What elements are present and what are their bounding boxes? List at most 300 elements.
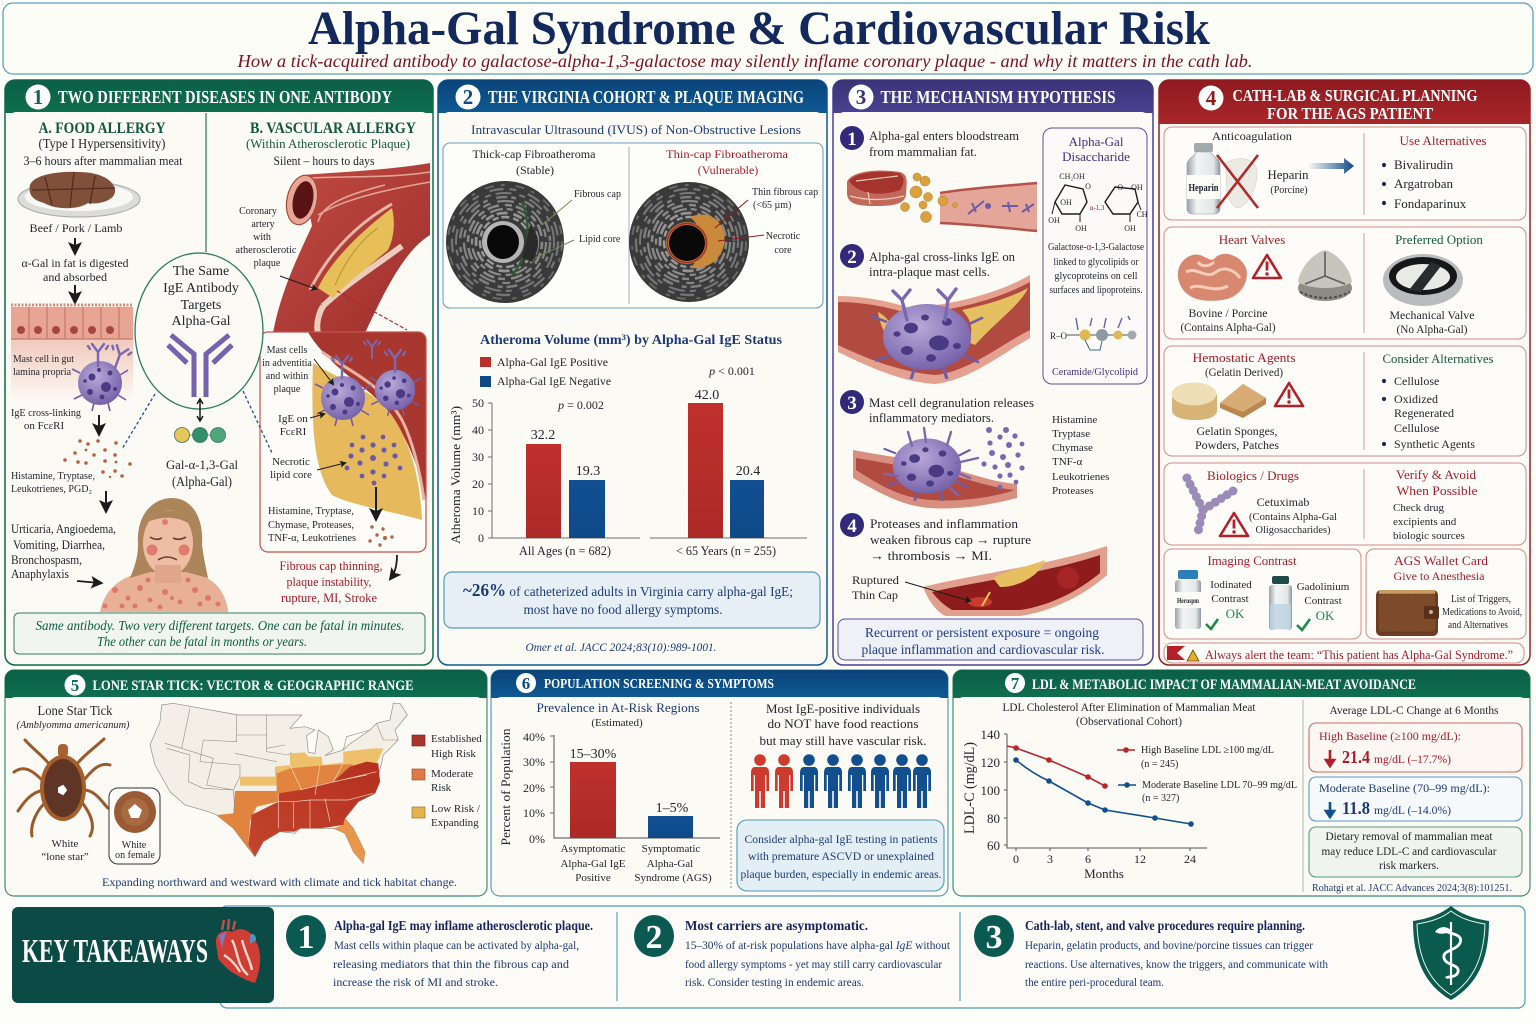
chart heading bbox=[1002, 700, 1256, 728]
panel 7 number bbox=[1005, 673, 1025, 693]
takeaway 2 bbox=[634, 915, 951, 989]
inset: female tick bbox=[109, 788, 160, 864]
arrow bbox=[98, 415, 100, 433]
label artery: with bbox=[253, 232, 271, 243]
check bbox=[1206, 619, 1218, 629]
double arrow bbox=[197, 399, 203, 421]
statement bbox=[760, 701, 926, 748]
bar chart: prevalence: 30% bbox=[523, 755, 545, 769]
central circle: same IgE bbox=[135, 253, 263, 409]
takeaway 2: risk. Consider testing in endemic areas. bbox=[685, 975, 864, 989]
bar chart: atheroma volume: 19.3 bbox=[576, 464, 600, 479]
step 3: inflammatory mediators. bbox=[869, 410, 994, 425]
label mast cell gut: Mast cell in gut bbox=[13, 353, 74, 365]
consider alternatives: Cellulose bbox=[1394, 421, 1439, 435]
bar chart: prevalence: Alpha-Gal bbox=[647, 858, 693, 870]
mediator list: Tryptase bbox=[1052, 428, 1090, 440]
label molecule: (Alpha-Gal) bbox=[172, 475, 232, 490]
chart legend: High Baseline LDL ≥100 mg/dL bbox=[1141, 745, 1274, 756]
IVUS image stable bbox=[446, 181, 564, 303]
card: hemostatic agents: Hemostatic Agents bbox=[1192, 350, 1296, 365]
labels plaque: FcεRI bbox=[280, 426, 307, 438]
iodinated label: Contrast bbox=[1211, 593, 1249, 605]
central circle: same IgE: Targets bbox=[181, 298, 221, 313]
takeaway 1: increase the risk of MI and stroke. bbox=[333, 975, 498, 989]
panel 3 number bbox=[848, 84, 874, 110]
alternatives: Bivalirudin bbox=[1394, 157, 1454, 172]
arrow bbox=[74, 238, 76, 252]
bar chart: prevalence: Alpha-Gal IgE bbox=[560, 858, 626, 870]
statement: do NOT have food reactions bbox=[768, 716, 918, 731]
statement: Most IgE-positive individuals bbox=[766, 701, 920, 716]
mediator list: TNF-α bbox=[1052, 456, 1082, 468]
panel 5 number: 5 bbox=[71, 676, 79, 695]
vascular allergy heading bbox=[246, 120, 416, 168]
map legend: High Risk bbox=[431, 748, 476, 760]
mediators bbox=[368, 525, 394, 547]
verify: Verify & Avoid bbox=[1396, 467, 1476, 482]
line chart: LDL: 12 bbox=[1134, 852, 1146, 866]
food allergy heading: A. FOOD ALLERGY bbox=[38, 120, 166, 137]
valve labels bbox=[1180, 306, 1474, 336]
alternatives: Use Alternatives bbox=[1400, 133, 1486, 148]
verify: excipients and bbox=[1393, 516, 1457, 528]
food allergy heading bbox=[24, 120, 183, 168]
structure: sugar rings: OH bbox=[1048, 216, 1060, 225]
stat: moderate baseline: mg/dL (–14.0%) bbox=[1374, 803, 1451, 817]
label artery: Coronary bbox=[239, 206, 277, 217]
granules bbox=[63, 439, 132, 478]
consider alternatives: Regenerated bbox=[1394, 406, 1454, 420]
card: anticoagulation bbox=[1164, 127, 1526, 220]
panel 4 number bbox=[1198, 86, 1224, 110]
thin-cap heading: Thin-cap Fibroatheroma bbox=[666, 147, 789, 161]
step 1 bbox=[840, 126, 1019, 159]
bar chart: atheroma volume: All Ages (n = 682) bbox=[519, 543, 611, 558]
step 2: 2 bbox=[847, 247, 857, 268]
card: imaging contrast: Imaging Contrast bbox=[1208, 553, 1297, 568]
label cross-linking: on FcεRI bbox=[24, 420, 65, 432]
cetuximab labels bbox=[1249, 495, 1337, 536]
cetuximab labels: (Contains Alpha-Gal bbox=[1249, 511, 1337, 523]
thin cap labels bbox=[715, 187, 818, 256]
takeaway 1: releasing mediators that thin the fibrous cap and bbox=[333, 957, 569, 971]
panel 7: LDL impact bbox=[953, 670, 1530, 896]
step 2 bbox=[840, 244, 1015, 279]
line chart: LDL bbox=[962, 727, 1207, 881]
vascular allergy heading: (Within Atherosclerotic Plaque) bbox=[246, 136, 410, 151]
labels plaque: in adventitia bbox=[262, 358, 312, 369]
label ruptured cap: Ruptured bbox=[852, 573, 899, 587]
iodinated label: Iodinated bbox=[1210, 579, 1252, 591]
map legend: Established bbox=[431, 733, 482, 745]
card: wallet: AGS Wallet Card bbox=[1394, 553, 1489, 568]
stat: high baseline: 21.4 bbox=[1342, 747, 1370, 767]
step 1: from mammalian fat. bbox=[869, 144, 977, 159]
labels plaque: Chymase, Proteases, bbox=[268, 519, 354, 531]
step 3: Mast cell degranulation releases bbox=[869, 395, 1034, 410]
structure: sugar rings: α-1,3 bbox=[1090, 204, 1105, 212]
bar chart: prevalence: Syndrome (AGS) bbox=[634, 872, 712, 884]
consider alternatives: Synthetic Agents bbox=[1394, 437, 1475, 451]
bar chart: atheroma volume: 32.2 bbox=[531, 428, 555, 443]
alternatives: Fondaparinux bbox=[1394, 196, 1467, 211]
illustration: degranulation bbox=[853, 427, 1025, 508]
panel 4 heading: FOR THE AGS PATIENT bbox=[1267, 104, 1434, 123]
description: Galactose-α-1,3-Galactose bbox=[1048, 242, 1144, 253]
step 4: weaken fibrous cap → rupture bbox=[870, 532, 1031, 547]
thick-cap heading bbox=[472, 147, 596, 177]
step 3: 3 bbox=[847, 393, 857, 414]
label molecule: Gal-α-1,3-Gal bbox=[166, 457, 238, 472]
bar chart: atheroma volume: 0 bbox=[478, 531, 484, 545]
central circle: same IgE: Alpha-Gal bbox=[171, 314, 231, 329]
bar chart: prevalence: 10% bbox=[523, 806, 545, 820]
box: disaccharide: Alpha-Gal bbox=[1069, 134, 1124, 149]
line chart: LDL: 80 bbox=[987, 811, 1000, 826]
callout: testing bbox=[737, 820, 944, 891]
structure: sugar rings: CH bbox=[1136, 210, 1148, 219]
callout: 26 percent bbox=[444, 572, 820, 628]
card: hemostatic agents: (Gelatin Derived) bbox=[1205, 365, 1283, 379]
callout: testing: Consider alpha-gal IgE testing in patients bbox=[744, 832, 938, 846]
chart legend bbox=[1117, 745, 1297, 804]
labels plaque: Mast cells bbox=[267, 345, 308, 356]
description: surfaces and lipoproteins. bbox=[1050, 285, 1142, 296]
iodinated label bbox=[1210, 579, 1252, 621]
label cross-linking bbox=[11, 407, 81, 432]
tick caption: “lone star” bbox=[41, 851, 89, 863]
icon: cetuximab antibody bbox=[1187, 478, 1233, 536]
icon: heparin vial bbox=[1187, 143, 1258, 214]
bar chart: atheroma volume: 50 bbox=[472, 396, 484, 410]
stat: moderate baseline bbox=[1309, 777, 1522, 821]
card: heart valves bbox=[1164, 227, 1526, 339]
consider alternatives: Consider Alternatives bbox=[1382, 351, 1494, 366]
arrow bbox=[105, 491, 107, 510]
IVUS box bbox=[443, 143, 823, 308]
legend bbox=[480, 355, 611, 388]
icon: steak on plate bbox=[18, 172, 140, 217]
icon: tick bbox=[14, 739, 110, 836]
map legend: Expanding bbox=[431, 817, 479, 829]
verify: biologic sources bbox=[1393, 530, 1465, 542]
line chart: LDL: 60 bbox=[987, 838, 1000, 853]
tick caption: White bbox=[52, 838, 79, 850]
bar chart: prevalence: 0% bbox=[529, 832, 545, 846]
label ruptured cap bbox=[852, 573, 899, 602]
stat: high baseline: mg/dL (–17.7%) bbox=[1374, 752, 1451, 766]
outcome text bbox=[280, 558, 382, 605]
map: geographic range bbox=[150, 703, 407, 863]
takeaway 2: food allergy symptoms - yet may still carry cardiovascular bbox=[685, 957, 942, 971]
icon: mechanical valve bbox=[1383, 254, 1463, 306]
gadolinium label: Contrast bbox=[1304, 595, 1342, 607]
label cross-linking: IgE cross-linking bbox=[11, 407, 81, 419]
panel 4 heading: CATH-LAB & SURGICAL PLANNING bbox=[1232, 86, 1478, 105]
takeaway 1: Alpha-gal IgE may inflame atherosclerotic plaque. bbox=[334, 919, 593, 934]
label mediators: Histamine, Tryptase, bbox=[11, 470, 95, 482]
chart heading bbox=[536, 700, 700, 729]
bar chart: prevalence: Asymptomatic bbox=[561, 843, 625, 855]
callout: same antibody: Same antibody. Two very different targets. One can be fatal in minutes. bbox=[36, 619, 404, 634]
icon: heart bbox=[216, 919, 260, 983]
panel 2: Virginia cohort bbox=[438, 80, 827, 665]
inset: female tick: White bbox=[122, 840, 147, 851]
line chart: LDL: 6 bbox=[1085, 852, 1091, 866]
symptom list: Anaphylaxis bbox=[11, 566, 69, 581]
mediator list: Histamine bbox=[1052, 414, 1097, 426]
IVUS heading: Intravascular Ultrasound (IVUS) of Non-Obstructive Lesions bbox=[471, 122, 801, 137]
valve labels: Mechanical Valve bbox=[1390, 308, 1474, 322]
icon: warning bbox=[1275, 383, 1303, 406]
bar chart: atheroma volume: < 65 Years (n = 255) bbox=[676, 543, 776, 558]
icon: gelatin sponges bbox=[1172, 382, 1266, 420]
food allergy heading: (Type I Hypersensitivity) bbox=[38, 137, 166, 152]
wallet label bbox=[1442, 594, 1522, 631]
card: hemostatic agents bbox=[1164, 346, 1526, 456]
label artery: atherosclerotic bbox=[236, 245, 297, 256]
labels plaque: Necrotic bbox=[272, 456, 310, 468]
pointer bbox=[905, 582, 970, 601]
callout: dietary removal: may reduce LDL-C and cardiovascular bbox=[1322, 844, 1497, 858]
callout: 26 percent: most have no food allergy symptoms. bbox=[524, 603, 722, 618]
alert bar: Always alert the team: “This patient has Alpha-Gal Syndrome.” bbox=[1205, 647, 1513, 662]
bar chart: prevalence bbox=[498, 728, 720, 884]
label mediators bbox=[11, 470, 95, 495]
consider alternatives: Oxidized bbox=[1394, 392, 1438, 406]
wallet label: Medications to Avoid, bbox=[1442, 607, 1522, 618]
thick-cap heading: (Stable) bbox=[516, 163, 554, 177]
card: heart valves: Preferred Option bbox=[1395, 232, 1483, 247]
title: Alpha-Gal Syndrome & Cardiovascular Risk bbox=[308, 2, 1210, 55]
label molecule bbox=[166, 457, 238, 490]
icon: antibody bbox=[168, 335, 232, 397]
valve labels: Bovine / Porcine bbox=[1188, 306, 1268, 320]
panel 4 number: 4 bbox=[1206, 86, 1217, 110]
panel 3 number: 3 bbox=[856, 85, 866, 109]
takeaway 2: 15–30% of at-risk populations have alpha-gal IgE without bbox=[685, 938, 951, 952]
IVUS image vulnerable bbox=[629, 182, 749, 302]
sponge labels: Powders, Patches bbox=[1195, 438, 1279, 452]
outcome text: Fibrous cap thinning, bbox=[280, 558, 382, 573]
callout: 26 percent: ~26% of catheterized adults in Virginia carry alpha-gal IgE; bbox=[463, 580, 793, 600]
takeaway 2: Most carriers are asymptomatic. bbox=[685, 919, 868, 934]
tick caption bbox=[41, 838, 89, 863]
icon: medical shield bbox=[1413, 906, 1489, 1000]
bar chart: prevalence: 20% bbox=[523, 781, 545, 795]
box: disaccharide bbox=[1043, 128, 1148, 384]
bar chart: prevalence: 15–30% bbox=[570, 747, 617, 762]
line chart: LDL: LDL-C (mg/dL) bbox=[962, 742, 978, 834]
labels plaque: plaque bbox=[274, 384, 301, 395]
callout: recurrent exposure: plaque inflammation and cardiovascular risk. bbox=[862, 643, 1104, 658]
structure: sugar rings bbox=[1048, 172, 1148, 233]
thin cap labels: core bbox=[774, 245, 792, 256]
label heparin: Heparin bbox=[1268, 167, 1309, 182]
vascular allergy heading: Silent – hours to days bbox=[274, 153, 374, 168]
labels plaque: IgE on bbox=[278, 413, 308, 425]
chart heading: (Estimated) bbox=[591, 717, 643, 729]
step 1: 1 bbox=[847, 129, 857, 150]
structure: sugar rings: O—OH bbox=[1117, 183, 1143, 192]
bar chart: atheroma volume bbox=[448, 364, 807, 558]
thin-cap heading bbox=[666, 147, 789, 177]
food allergy heading: 3–6 hours after mammalian meat bbox=[24, 153, 183, 168]
bar chart: prevalence: 40% bbox=[523, 730, 545, 744]
chart legend: (n = 245) bbox=[1141, 759, 1178, 770]
description: glycoproteins on cell bbox=[1054, 271, 1138, 282]
sponge labels: Gelatin Sponges, bbox=[1196, 424, 1278, 438]
map legend: Low Risk / bbox=[431, 803, 481, 815]
takeaway 3: reactions. Use alternatives, know the triggers, and communicate with bbox=[1025, 957, 1328, 971]
fibrous cap label: Lipid core bbox=[579, 234, 621, 245]
label artery: artery bbox=[251, 219, 275, 230]
verify bbox=[1393, 467, 1478, 542]
wallet label: List of Triggers, bbox=[1451, 594, 1511, 605]
legend: Alpha-Gal IgE Positive bbox=[497, 355, 608, 369]
symptom list: Vomiting, Diarrhea, bbox=[13, 537, 105, 552]
valve labels: (No Alpha-Gal) bbox=[1396, 322, 1468, 336]
takeaway 3: the entire peri-procedural team. bbox=[1025, 975, 1164, 989]
illustration: woman with rash bbox=[100, 498, 228, 612]
callout: dietary removal: Dietary removal of mammalian meat bbox=[1326, 829, 1493, 843]
callout: same antibody bbox=[14, 613, 425, 654]
labels plaque: TNF-α, Leukotrienes bbox=[268, 532, 356, 544]
gut epithelium bbox=[11, 305, 133, 399]
step 4 bbox=[840, 513, 1031, 563]
description: linked to glycolipids or bbox=[1054, 257, 1139, 268]
structure: glycolipid bbox=[1050, 316, 1136, 350]
chart legend: (n = 327) bbox=[1142, 793, 1179, 804]
tick heading: Lone Star Tick bbox=[38, 704, 112, 719]
callout: testing: plaque burden, especially in endemic areas. bbox=[740, 867, 942, 881]
panel 7 heading: LDL & METABOLIC IMPACT OF MAMMALIAN-MEAT AVOIDANCE bbox=[1032, 677, 1416, 693]
thick-cap heading: Thick-cap Fibroatheroma bbox=[472, 147, 596, 161]
icon: warning bbox=[1253, 255, 1281, 278]
bar chart: prevalence: Symptomatic bbox=[642, 843, 700, 855]
legend: Alpha-Gal IgE Negative bbox=[497, 374, 611, 388]
labels plaque: Histamine, Tryptase, bbox=[268, 505, 354, 517]
text absorption bbox=[22, 256, 128, 284]
heading: average change: Average LDL-C Change at 6 Months bbox=[1330, 703, 1499, 717]
text absorption: α-Gal in fat is digested bbox=[22, 256, 128, 270]
card: wallet: Give to Anesthesia bbox=[1394, 569, 1485, 583]
card: imaging contrast bbox=[1164, 549, 1361, 639]
verify: Check drug bbox=[1393, 502, 1445, 514]
illustration: ruptured plaque bbox=[923, 546, 1107, 616]
label mediators: Leukotrienes, PGD₂ bbox=[11, 483, 92, 495]
callout: testing: with premature ASCVD or unexplained bbox=[748, 849, 934, 863]
labels plaque: and within bbox=[266, 371, 308, 382]
cetuximab labels: Cetuximab bbox=[1257, 495, 1309, 509]
labels plaque bbox=[262, 345, 356, 544]
pictogram: people bbox=[751, 754, 931, 808]
panel 2 heading: THE VIRGINIA COHORT & PLAQUE IMAGING bbox=[488, 87, 804, 107]
wallet label: and Alternatives bbox=[1448, 620, 1508, 631]
label heparin bbox=[1268, 167, 1309, 196]
step 2: intra-plaque mast cells. bbox=[869, 264, 990, 279]
card: anticoagulation: Anticoagulation bbox=[1212, 129, 1292, 143]
card: wallet bbox=[1366, 549, 1526, 639]
bar chart: atheroma volume: p = 0.002 bbox=[557, 398, 604, 412]
step 1: Alpha-gal enters bloodstream bbox=[869, 128, 1019, 143]
labels plaque: lipid core bbox=[270, 469, 312, 481]
valve labels: (Contains Alpha-Gal) bbox=[1180, 320, 1276, 334]
takeaway 1: Mast cells within plaque can be activated by alpha-gal, bbox=[334, 938, 579, 952]
icon: wallet bbox=[1376, 590, 1439, 636]
inset: female tick: on female bbox=[115, 850, 155, 861]
map legend: Moderate bbox=[431, 768, 473, 780]
panel 6 number bbox=[516, 673, 536, 693]
panel 6 number: 6 bbox=[522, 674, 530, 693]
bar chart: prevalence: Positive bbox=[575, 872, 611, 884]
title banner bbox=[3, 2, 1533, 74]
bar chart: atheroma volume: 42.0 bbox=[695, 388, 719, 403]
granule cluster bbox=[345, 435, 402, 485]
citation: Omer et al. JACC 2024;83(10):989-1001. bbox=[526, 640, 716, 654]
fibrous cap label: Fibrous cap bbox=[574, 189, 621, 200]
bar chart: prevalence: Percent of Population bbox=[498, 728, 513, 846]
mediator list: Proteases bbox=[1052, 485, 1094, 497]
stat: moderate baseline: 11.8 bbox=[1342, 798, 1370, 818]
map legend bbox=[412, 733, 482, 829]
gadolinium label: Gadolinium bbox=[1297, 581, 1350, 593]
icon: bioprosthetic valve bbox=[1298, 250, 1352, 301]
label artery: plaque bbox=[254, 258, 281, 269]
symptom list: Urticaria, Angioedema, bbox=[11, 521, 116, 536]
arrow bbox=[74, 285, 76, 301]
card: biologics: Biologics / Drugs bbox=[1207, 468, 1299, 483]
bar chart: atheroma volume: 30 bbox=[472, 450, 484, 464]
structure: sugar rings: O bbox=[1085, 182, 1091, 191]
gadolinium label bbox=[1297, 581, 1350, 623]
statement: but may still have vascular risk. bbox=[760, 733, 926, 748]
sponge labels bbox=[1195, 424, 1279, 452]
panel 4 heading bbox=[1232, 86, 1478, 123]
gadolinium label: OK bbox=[1316, 608, 1335, 623]
takeaways heading: KEY TAKEAWAYS bbox=[22, 933, 208, 970]
arrow bbox=[391, 555, 397, 578]
box: disaccharide: Disaccharide bbox=[1062, 149, 1130, 164]
symptom list bbox=[11, 521, 116, 581]
icon: vial iodinated: Heruspm bbox=[1177, 597, 1199, 605]
stat: high baseline bbox=[1309, 723, 1522, 772]
step 4: 4 bbox=[847, 516, 857, 537]
inset: plaque detail bbox=[260, 332, 426, 552]
structure: sugar rings: OH bbox=[1060, 198, 1072, 207]
fibrous cap label bbox=[535, 189, 621, 258]
panel 4: cath-lab planning bbox=[1159, 80, 1530, 665]
thin cap labels: Necrotic bbox=[766, 231, 801, 242]
line chart: LDL: 24 bbox=[1184, 852, 1196, 866]
chart legend: Moderate Baseline LDL 70–99 mg/dL bbox=[1142, 780, 1297, 791]
structure: sugar rings: CH₂OH bbox=[1059, 172, 1085, 181]
panel 7 number: 7 bbox=[1011, 674, 1020, 693]
icon: vial iodinated bbox=[1175, 570, 1201, 629]
symptom list: Bronchospasm, bbox=[11, 552, 82, 567]
panel 3: mechanism bbox=[833, 80, 1153, 665]
check bbox=[1297, 619, 1310, 630]
line chart: LDL: Months bbox=[1084, 866, 1124, 881]
panel 1 number: 1 bbox=[33, 85, 43, 109]
panel 2 number: 2 bbox=[463, 85, 473, 109]
panel 5 number bbox=[64, 674, 86, 696]
subtitle: How a tick-acquired antibody to galactose-alpha-1,3-galactose may silently inflame coronary plaque - and why it matters in the cath lab. bbox=[236, 51, 1253, 71]
mediator list: Chymase bbox=[1052, 442, 1093, 454]
bar chart: atheroma volume: 40 bbox=[472, 423, 484, 437]
outcome text: plaque instability, bbox=[286, 574, 372, 589]
